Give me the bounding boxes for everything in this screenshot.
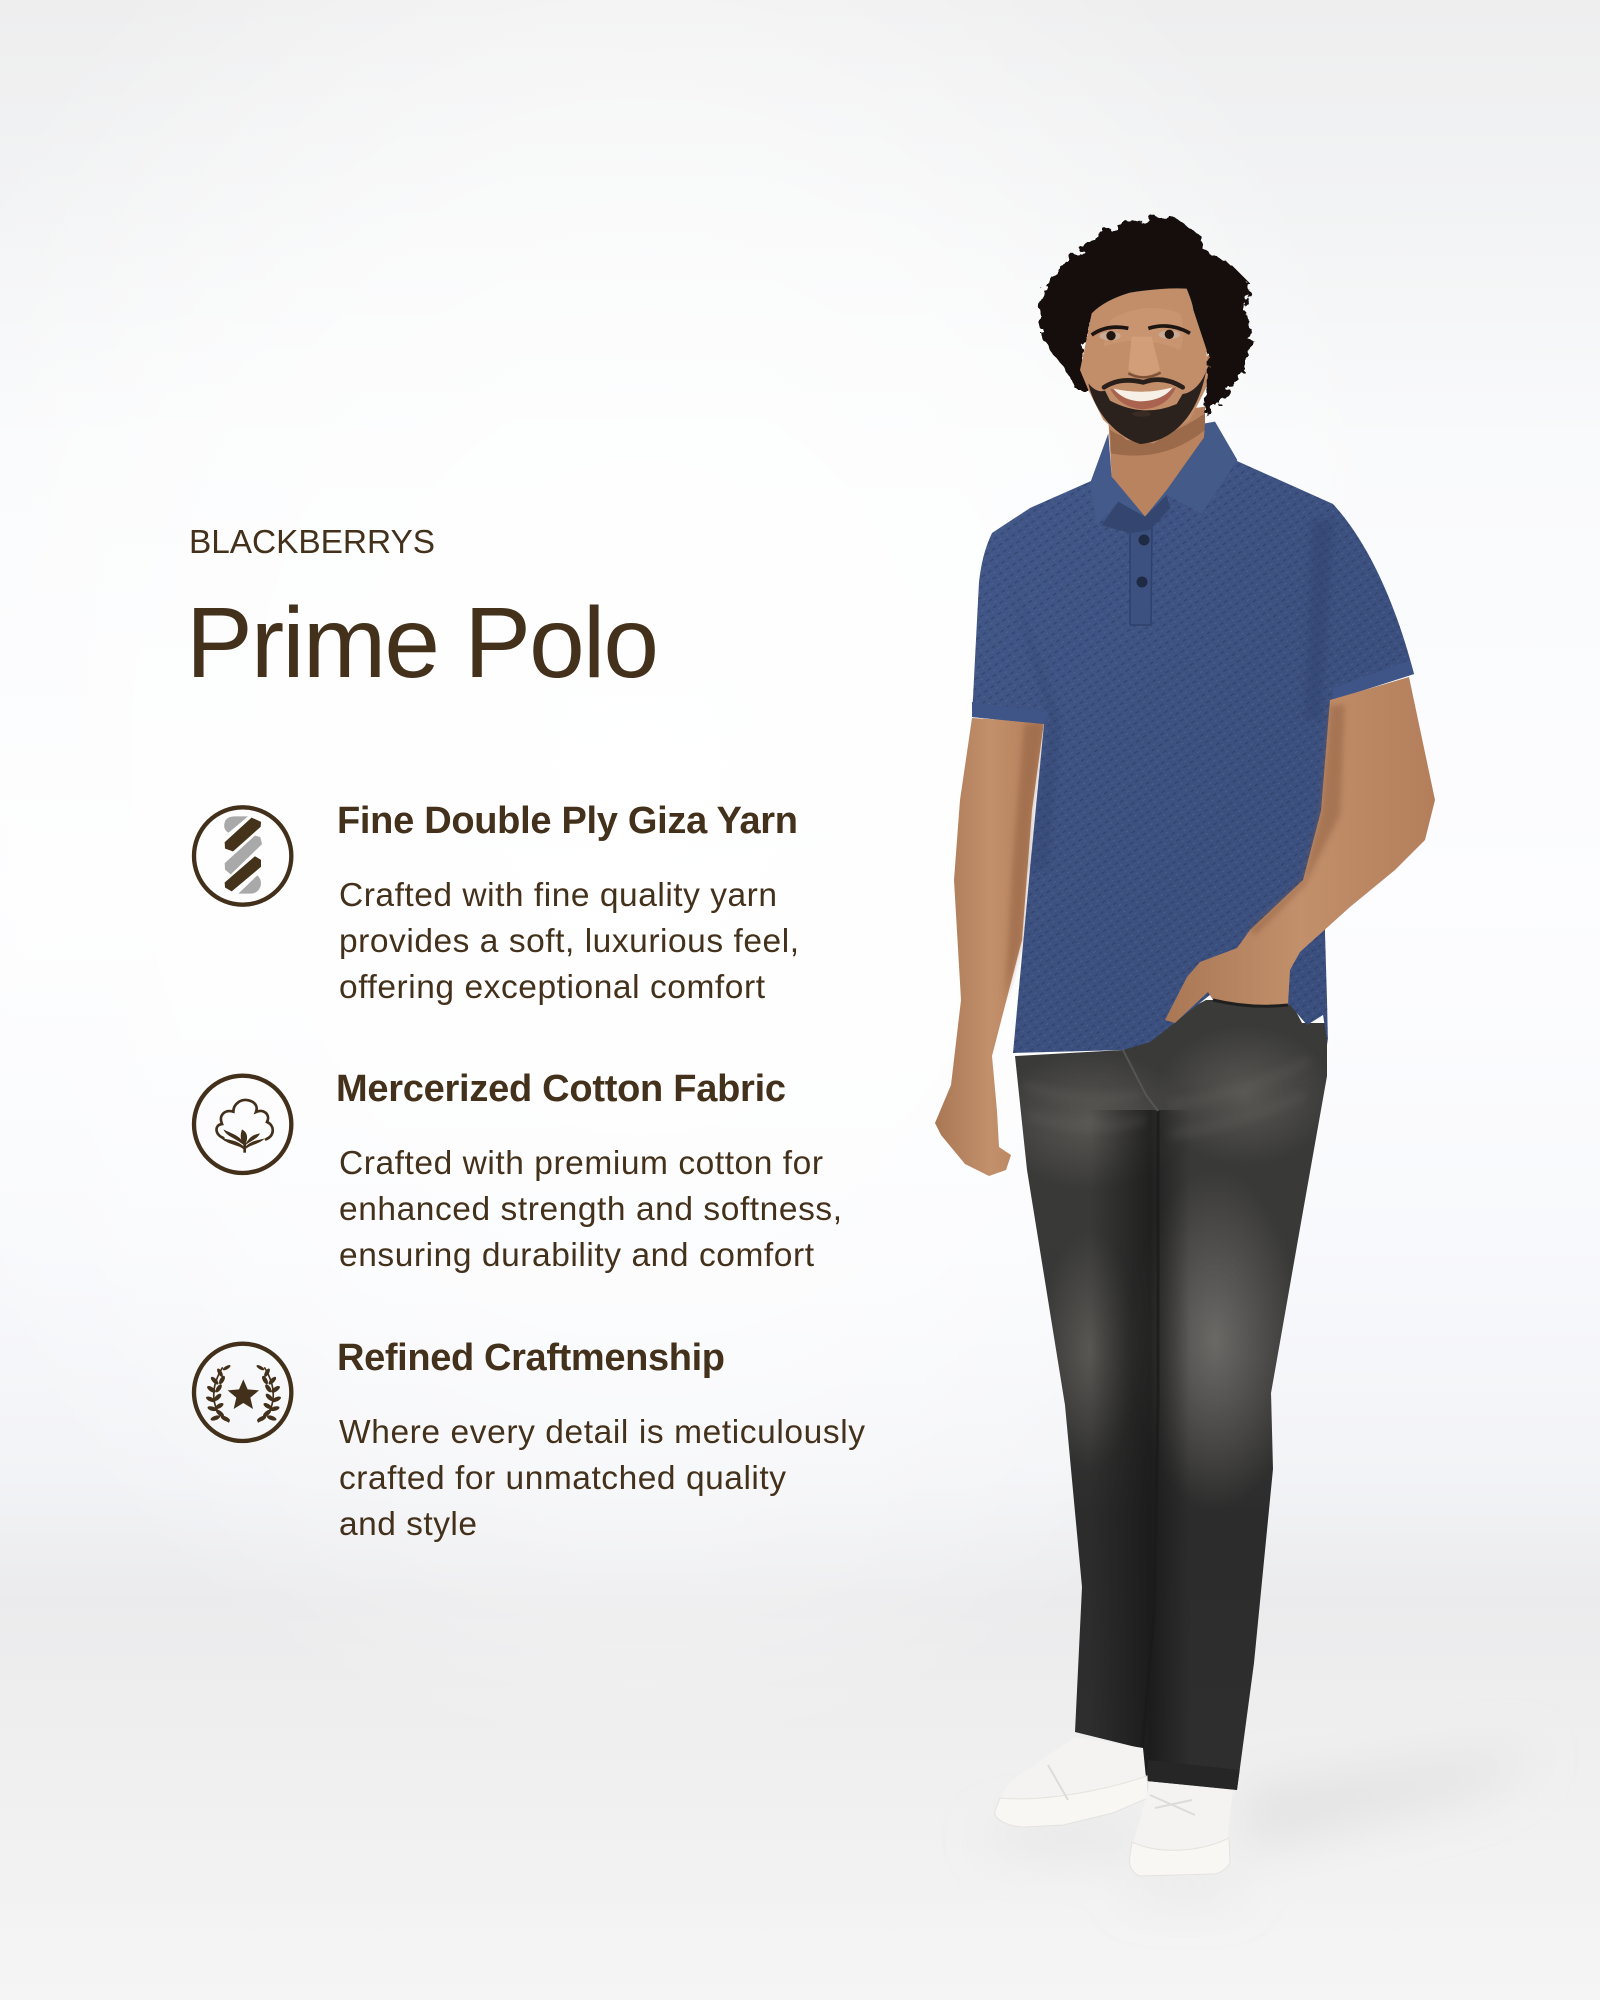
face — [1080, 288, 1207, 443]
text block: cotton: enhanced strength and softness, — [339, 1191, 842, 1228]
eyebrows and eyes — [1092, 326, 1190, 340]
ear — [1207, 348, 1232, 382]
text block: craftsmanship — [339, 1414, 865, 1543]
right sneaker — [1130, 1782, 1233, 1876]
head — [1040, 213, 1252, 533]
soul patch — [1132, 411, 1151, 417]
text block: craftsmanship: crafted for unmatched quality — [339, 1460, 786, 1497]
left arm and hand — [935, 718, 1044, 1176]
polo shirt — [972, 461, 1414, 1053]
icon: cotton boll — [194, 1076, 291, 1173]
feature panel: cotton — [194, 1068, 842, 1274]
right arm and hand in pocket — [1165, 677, 1435, 1023]
left sneaker — [995, 1737, 1148, 1827]
sneakers — [995, 1737, 1233, 1876]
sleeve hems — [972, 660, 1414, 724]
heading: yarn: Fine Double Ply Giza Yarn — [337, 800, 798, 842]
collar — [1090, 433, 1145, 525]
model photo: man in navy polo and charcoal jeans — [935, 214, 1435, 1876]
text block: cotton — [339, 1145, 842, 1274]
neck — [1108, 407, 1205, 517]
text block: cotton: Crafted with premium cotton for — [339, 1145, 823, 1182]
heading: craftsmanship: Refined Craftmenship — [337, 1337, 725, 1379]
title: Prime Polo — [186, 587, 659, 699]
hair — [1040, 213, 1252, 417]
text block: yarn: Crafted with fine quality yarn — [339, 877, 777, 914]
icon: twisted yarn — [194, 807, 291, 905]
nose — [1128, 337, 1160, 376]
beard — [1088, 372, 1206, 444]
placket — [1130, 525, 1152, 625]
text block: yarn — [339, 877, 799, 1006]
jeans — [990, 1000, 1335, 1790]
buttons — [1138, 534, 1150, 546]
feature panel: yarn — [194, 800, 799, 1006]
floor shadow — [985, 1750, 1540, 1893]
text block: craftsmanship: and style — [339, 1506, 477, 1543]
heading: cotton: Mercerized Cotton Fabric — [336, 1068, 786, 1110]
text block: yarn: provides a soft, luxurious feel, — [339, 923, 799, 960]
text block: yarn: offering exceptional comfort — [339, 969, 766, 1006]
feature panel: craftsmanship — [194, 1337, 865, 1543]
hair underlay — [1087, 280, 1208, 357]
placket opening — [1102, 495, 1170, 533]
brand label: BLACKBERRYS — [189, 524, 435, 561]
icon: star with laurel wreath — [194, 1344, 291, 1441]
mouth — [1110, 387, 1176, 409]
text block: craftsmanship: Where every detail is meticulously — [339, 1414, 865, 1451]
text block: cotton: ensuring durability and comfort — [339, 1237, 815, 1274]
